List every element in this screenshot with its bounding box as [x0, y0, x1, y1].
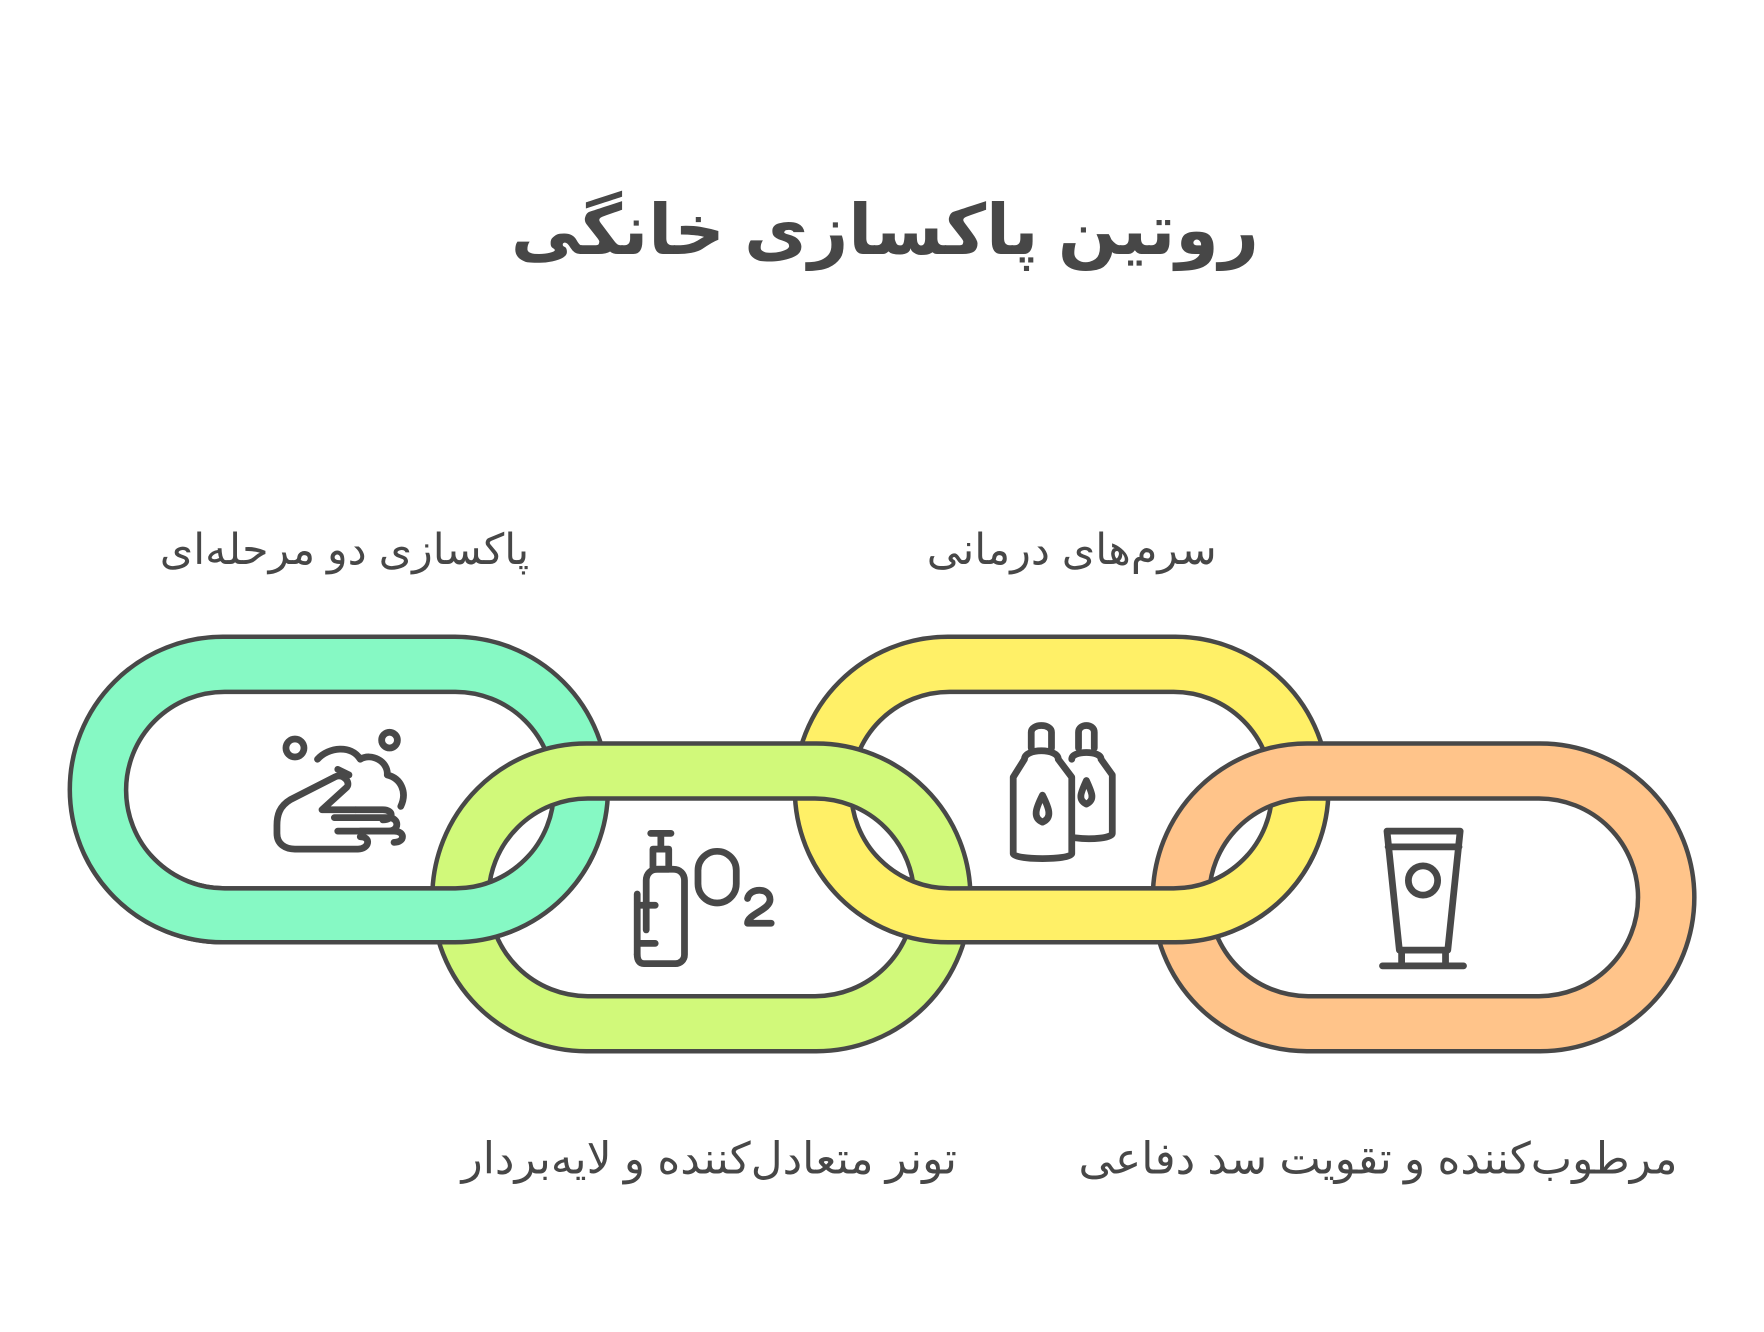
- overlap redraw: [81, 854, 1317, 944]
- chain links: [70, 637, 1694, 1051]
- label: two-step cleansing: پاکسازی دو مرحله‌ای: [160, 526, 529, 575]
- title: روتین پاکسازی خانگی: [511, 190, 1259, 271]
- label: treatment serums: سرم‌های درمانی: [927, 526, 1217, 575]
- icon: moisturizer tube: [1382, 831, 1464, 966]
- icon: serum droppers: [1013, 726, 1112, 859]
- icon: washing hands: [277, 732, 403, 849]
- label: toner: تونر متعادل‌کننده و لایه‌بردار: [460, 1135, 957, 1185]
- link 1: green: [70, 637, 608, 942]
- label: moisturizer: مرطوب‌کننده و تقویت سد دفاعی: [1078, 1135, 1677, 1185]
- link 3: yellow: [795, 637, 1328, 942]
- icon: pump bottle with O2: [637, 833, 771, 964]
- link 4: orange: [1153, 743, 1694, 1051]
- link 2: lime: [432, 743, 970, 1051]
